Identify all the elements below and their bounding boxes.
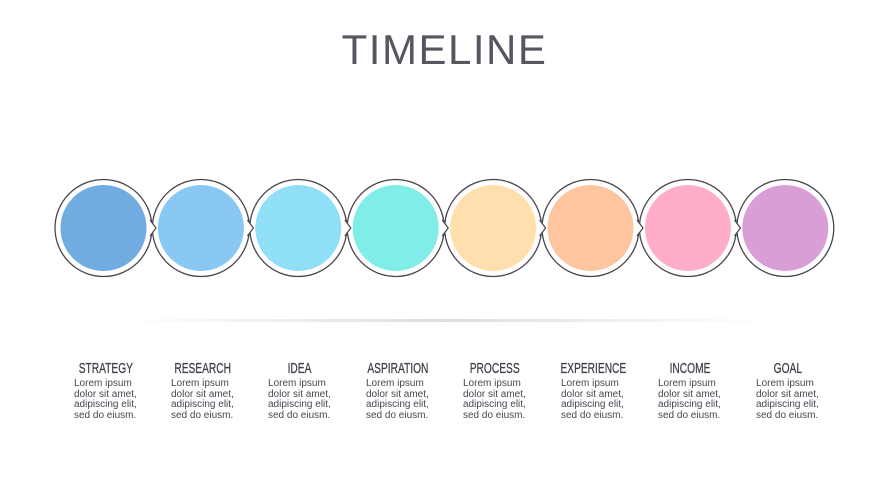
label: experience: EXPERIENCE: [560, 360, 626, 377]
label: income: [658, 360, 721, 421]
label: aspiration: ASPIRATION: [367, 360, 429, 377]
label: goal: GOAL: [774, 360, 802, 377]
label: aspiration: sed do eiusm.: [366, 410, 428, 421]
label: income: adipiscing elit,: [658, 399, 721, 410]
label: aspiration: adipiscing elit,: [366, 399, 429, 410]
label: strategy: dolor sit amet,: [74, 389, 137, 400]
label: process: adipiscing elit,: [463, 399, 526, 410]
timeline circles: [54, 178, 834, 322]
label: process: sed do eiusm.: [463, 410, 525, 421]
label: process: [463, 360, 526, 421]
label: idea: sed do eiusm.: [268, 410, 330, 421]
label: idea: dolor sit amet,: [268, 389, 331, 400]
label: process: PROCESS: [470, 360, 520, 377]
label: idea: [268, 360, 331, 421]
label: research: adipiscing elit,: [171, 399, 234, 410]
arrow notches: [150, 220, 740, 236]
label: strategy: adipiscing elit,: [74, 399, 137, 410]
label: idea: Lorem ipsum: [268, 378, 326, 389]
label: goal: Lorem ipsum: [756, 378, 814, 389]
colored fills: [60, 185, 828, 271]
label: experience: [560, 360, 626, 421]
label: experience: Lorem ipsum: [561, 378, 619, 389]
label: experience: dolor sit amet,: [561, 389, 624, 400]
label: aspiration: [366, 360, 429, 421]
label: income: Lorem ipsum: [658, 378, 716, 389]
label: aspiration: dolor sit amet,: [366, 389, 429, 400]
label: research: Lorem ipsum: [171, 378, 229, 389]
label: goal: [756, 360, 819, 421]
label: goal: dolor sit amet,: [756, 389, 819, 400]
label: research: dolor sit amet,: [171, 389, 234, 400]
label: goal: sed do eiusm.: [756, 410, 818, 421]
label: experience: adipiscing elit,: [561, 399, 624, 410]
label: experience: sed do eiusm.: [561, 410, 623, 421]
shadow line: [120, 319, 770, 322]
label: strategy: Lorem ipsum: [74, 378, 132, 389]
label: research: [171, 360, 234, 421]
label: goal: adipiscing elit,: [756, 399, 819, 410]
label: aspiration: Lorem ipsum: [366, 378, 424, 389]
title: TIMELINE: [342, 26, 547, 73]
label: income: INCOME: [670, 360, 710, 377]
label: strategy: sed do eiusm.: [74, 410, 136, 421]
label: strategy: [74, 360, 137, 421]
label: income: dolor sit amet,: [658, 389, 721, 400]
label: research: sed do eiusm.: [171, 410, 233, 421]
label: process: dolor sit amet,: [463, 389, 526, 400]
label: process: Lorem ipsum: [463, 378, 521, 389]
label: income: sed do eiusm.: [658, 410, 720, 421]
label: strategy: STRATEGY: [79, 360, 133, 377]
label: idea: adipiscing elit,: [268, 399, 331, 410]
label: research: RESEARCH: [175, 360, 231, 377]
label: idea: IDEA: [288, 360, 312, 377]
